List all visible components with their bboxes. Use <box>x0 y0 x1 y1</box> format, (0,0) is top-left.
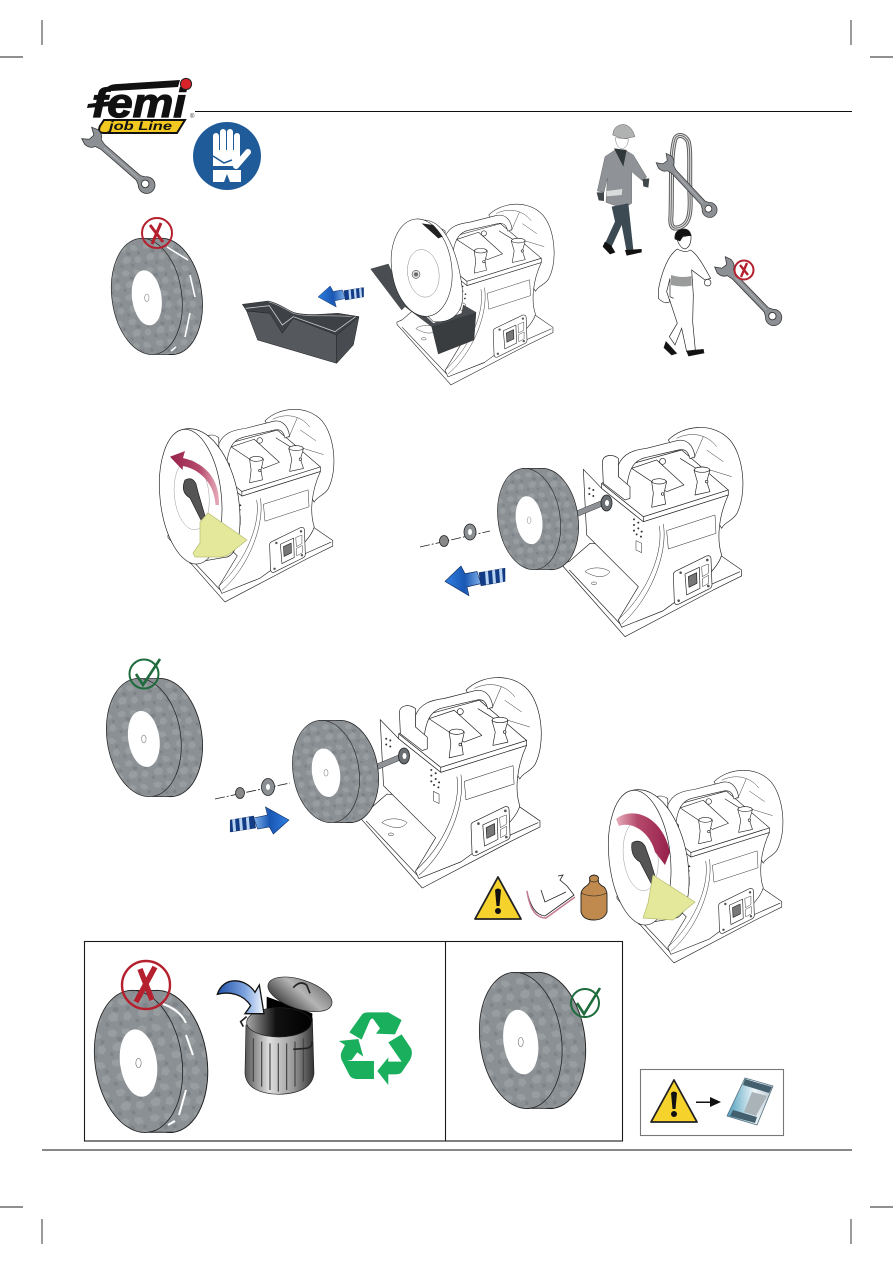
hand with cloth <box>193 513 247 557</box>
axis line <box>420 531 490 547</box>
rotation arrow: anticlockwise <box>170 451 219 505</box>
sling and spanner (lifting tools) <box>655 135 721 228</box>
panel: read the manual <box>640 1070 784 1136</box>
warning triangle <box>475 877 521 919</box>
new wheel with check mark <box>471 967 600 1114</box>
worn wheel, do not use <box>104 218 210 359</box>
recycling symbol <box>339 1012 412 1085</box>
footer rule <box>42 1149 852 1151</box>
icon: spanner (tools required) <box>80 126 159 198</box>
logo: femi job Line <box>87 78 195 133</box>
spanner with prohibition mark <box>713 255 786 330</box>
grinder: tightening nut <box>602 770 783 963</box>
new wheel, approved <box>99 659 210 801</box>
logo: femi job Line: femi <box>92 80 188 126</box>
grinder with tray fitted <box>371 204 554 385</box>
worn wheel with prohibition mark <box>85 961 217 1138</box>
washer <box>262 778 274 796</box>
hand with cloth <box>643 875 695 920</box>
axis line <box>215 773 327 799</box>
washer <box>464 524 476 540</box>
nut <box>236 788 244 798</box>
rubbish bin with arrow <box>217 970 336 1094</box>
water tray <box>242 301 359 363</box>
grinder: fitting new wheel <box>215 678 541 888</box>
shaft and collar <box>372 754 403 771</box>
nut <box>440 536 448 546</box>
grinder with wheel removed <box>420 427 743 637</box>
shaft and collar <box>574 500 605 517</box>
spanner on nut <box>632 841 674 918</box>
arrow: pull wheel off <box>445 566 505 596</box>
rotation arrow: clockwise <box>616 813 670 865</box>
tray under the wheel <box>371 264 476 354</box>
icon: arm strength <box>527 875 575 918</box>
arrow: remove tray <box>318 286 364 307</box>
arrow: push wheel on <box>230 807 289 834</box>
person without protection <box>658 229 711 356</box>
worn wheel removed <box>491 464 585 574</box>
panel: disposal and storage <box>84 942 622 1141</box>
logo: femi job Line: ® <box>190 113 195 120</box>
icon: weight <box>581 875 607 920</box>
logo: femi job Line: job Line <box>106 121 173 133</box>
icon: wear protective gloves <box>193 122 261 190</box>
new wheel <box>286 716 385 827</box>
arrow <box>696 1097 721 1107</box>
worker with protective clothing <box>597 124 649 256</box>
front wheel <box>385 215 463 322</box>
spanner on nut <box>183 479 222 554</box>
header rule <box>195 110 852 112</box>
grinder: loosening nut with spanner and cloth <box>153 409 334 602</box>
manual booklet <box>727 1078 773 1125</box>
